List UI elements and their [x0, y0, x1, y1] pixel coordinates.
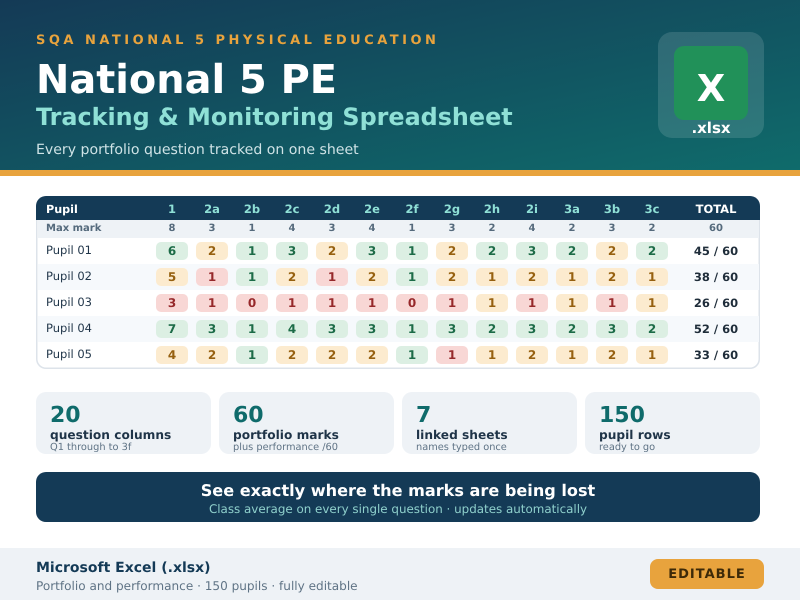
pupil 02 row: 2 — [608, 270, 616, 284]
pupil 05 row: 2 — [528, 348, 536, 362]
pupil 05 row: 2 — [328, 348, 336, 362]
pupil 03 row: 1 — [608, 296, 616, 310]
max mark row: 8 — [169, 223, 175, 234]
stat card: portfolio marks: plus performance /60 — [233, 442, 338, 453]
pupil 05 row — [46, 346, 738, 364]
stat card: linked sheets: names typed once — [416, 442, 507, 453]
pupil 04 row: 52 / 60 — [694, 322, 738, 336]
table header row: 3b — [604, 202, 620, 216]
pupil 03 row: 26 / 60 — [694, 296, 738, 310]
callout heading: See exactly where the marks are being lost — [201, 480, 595, 500]
pupil 01 row: 6 — [168, 244, 176, 258]
pupil 01 row: 45 / 60 — [694, 244, 738, 258]
pupil 01 row: 3 — [288, 244, 296, 258]
pupil 03 row — [46, 294, 738, 312]
pupil 04 row: 2 — [488, 322, 496, 336]
pupil 02 row: 1 — [648, 270, 656, 284]
pupil 04 row: Pupil 04 — [46, 321, 92, 335]
max mark row: 3 — [609, 223, 615, 234]
pupil 01 row: 2 — [488, 244, 496, 258]
pupil 03 row: 1 — [288, 296, 296, 310]
pupil 05 row: 2 — [608, 348, 616, 362]
stat card: portfolio marks: portfolio marks — [233, 428, 339, 442]
pupil 02 row: 2 — [448, 270, 456, 284]
editable badge: EDITABLE — [668, 567, 746, 582]
max mark row: 4 — [289, 223, 295, 234]
pupil 02 row: 2 — [368, 270, 376, 284]
pupil 05 row: 1 — [568, 348, 576, 362]
pupil 03 row: 1 — [448, 296, 456, 310]
header banner — [0, 0, 800, 170]
pupil 02 row: 1 — [488, 270, 496, 284]
stat card: question columns: 20 — [50, 403, 81, 428]
stat card: linked sheets — [402, 392, 577, 454]
pupil 05 row: 1 — [648, 348, 656, 362]
pupil 05 row: 4 — [168, 348, 176, 362]
max mark row — [38, 220, 758, 238]
pupil 02 row: 1 — [248, 270, 256, 284]
icon: green X tile — [674, 46, 748, 120]
footer bar — [0, 548, 800, 600]
table header row: 3a — [564, 202, 580, 216]
pupil 01 row: 2 — [568, 244, 576, 258]
table header row: TOTAL — [696, 202, 736, 216]
table header row: 2h — [484, 202, 500, 216]
pupil 03 row: 0 — [248, 296, 256, 310]
table header row: 1 — [168, 202, 176, 216]
pupil 02 row: 1 — [208, 270, 216, 284]
eyebrow text: SQA NATIONAL 5 PHYSICAL EDUCATION — [36, 33, 439, 48]
stat card: pupil rows: ready to go — [599, 442, 655, 453]
pupil 02 row: Pupil 02 — [46, 269, 92, 283]
pupil 02 row: 1 — [408, 270, 416, 284]
max mark row: 60 — [709, 223, 723, 234]
callout subtext: Class average on every single question · updates automatically — [209, 502, 587, 516]
pupil 04 row: 3 — [368, 322, 376, 336]
pupil 03 row: 1 — [208, 296, 216, 310]
pupil 01 row: 1 — [408, 244, 416, 258]
pupil 01 row — [46, 242, 738, 260]
pupil 01 row: 1 — [248, 244, 256, 258]
callout banner — [36, 472, 760, 522]
pupil 04 row: 7 — [168, 322, 176, 336]
pupil 05 row: 2 — [288, 348, 296, 362]
pupil 03 row: Pupil 03 — [46, 295, 92, 309]
pupil 05 row: 1 — [448, 348, 456, 362]
pupil 03 row: 0 — [408, 296, 416, 310]
pupil 05 row: Pupil 05 — [46, 347, 92, 361]
footer details: Portfolio and performance · 150 pupils · fully editable — [36, 579, 358, 593]
pupil 02 row: 2 — [288, 270, 296, 284]
pupil 05 row: 1 — [248, 348, 256, 362]
pupil 04 row: 3 — [448, 322, 456, 336]
max mark row: 2 — [649, 223, 655, 234]
pupil 03 row: 1 — [488, 296, 496, 310]
max mark row: 4 — [529, 223, 535, 234]
stat card: pupil rows: 150 — [599, 403, 645, 428]
pupil 01 row: 2 — [448, 244, 456, 258]
max mark row: 3 — [329, 223, 335, 234]
pupil 04 row: 2 — [648, 322, 656, 336]
pupil 03 row: 1 — [648, 296, 656, 310]
pupil 04 row: 3 — [608, 322, 616, 336]
table header row: Pupil — [46, 203, 78, 216]
footer title: Microsoft Excel (.xlsx) — [36, 560, 211, 576]
stat card: portfolio marks: 60 — [233, 403, 264, 428]
table header row: 2d — [324, 202, 340, 216]
max mark row: 2 — [489, 223, 495, 234]
max mark row: 3 — [209, 223, 215, 234]
table header row — [36, 196, 760, 220]
pupil 04 row: 3 — [328, 322, 336, 336]
pupil 03 row: 3 — [168, 296, 176, 310]
pupil 04 row: 2 — [568, 322, 576, 336]
pupil 01 row: 3 — [368, 244, 376, 258]
pupil 04 row: 4 — [288, 322, 296, 336]
pupil 05 row: 2 — [368, 348, 376, 362]
pupil 01 row: 2 — [648, 244, 656, 258]
pupil 05 row: 2 — [208, 348, 216, 362]
file extension label: .xlsx — [691, 119, 731, 137]
pupil 03 row: 1 — [328, 296, 336, 310]
pupil 04 row — [38, 316, 758, 342]
pupil 01 row: 2 — [328, 244, 336, 258]
pupil 01 row: 3 — [528, 244, 536, 258]
max mark row: 1 — [249, 223, 255, 234]
title: National 5 PE — [36, 57, 337, 103]
pupil 04 row: 3 — [208, 322, 216, 336]
marks table — [36, 196, 760, 369]
tagline: Every portfolio question tracked on one sheet — [36, 142, 359, 158]
pupil 05 row: 1 — [408, 348, 416, 362]
pupil 03 row: 1 — [568, 296, 576, 310]
max mark row: 3 — [449, 223, 455, 234]
table header row: 2a — [204, 202, 220, 216]
pupil 02 row: 38 / 60 — [694, 270, 738, 284]
pupil 01 row: 2 — [608, 244, 616, 258]
pupil 02 row — [38, 264, 758, 290]
max mark row: Max mark — [46, 223, 101, 234]
table header row: 3c — [645, 202, 659, 216]
pupil 01 row: 2 — [208, 244, 216, 258]
max mark row: 2 — [569, 223, 575, 234]
stat card: portfolio marks — [219, 392, 394, 454]
max mark row: 4 — [369, 223, 375, 234]
stat card: linked sheets: linked sheets — [416, 428, 508, 442]
stat card: question columns — [36, 392, 211, 454]
stat card: question columns: question columns — [50, 428, 171, 442]
table header row: 2b — [244, 202, 260, 216]
table header row: 2c — [285, 202, 299, 216]
stat card: linked sheets: 7 — [416, 403, 431, 428]
pupil 04 row: 1 — [248, 322, 256, 336]
stat card: question columns: Q1 through to 3f — [50, 442, 131, 453]
pupil 03 row: 1 — [368, 296, 376, 310]
accent stripe — [0, 170, 800, 176]
table header row: 2g — [444, 202, 460, 216]
pupil 04 row: 3 — [528, 322, 536, 336]
pupil 02 row: 2 — [528, 270, 536, 284]
table header row: 2e — [364, 202, 380, 216]
stat card: pupil rows — [585, 392, 760, 454]
editable badge — [650, 559, 764, 589]
stat card: pupil rows: pupil rows — [599, 428, 671, 442]
pupil 05 row: 33 / 60 — [694, 348, 738, 362]
pupil 02 row: 5 — [168, 270, 176, 284]
pupil 01 row: Pupil 01 — [46, 243, 92, 257]
table header row: 2f — [405, 202, 419, 216]
pupil 02 row: 1 — [568, 270, 576, 284]
subtitle: Tracking & Monitoring Spreadsheet — [36, 103, 513, 131]
icon: excel file — [658, 32, 764, 138]
table header row: 2i — [526, 202, 538, 216]
pupil 05 row: 1 — [488, 348, 496, 362]
pupil 04 row: 1 — [408, 322, 416, 336]
pupil 02 row: 1 — [328, 270, 336, 284]
max mark row: 1 — [409, 223, 415, 234]
icon: green X tile: X — [697, 67, 725, 110]
pupil 03 row: 1 — [528, 296, 536, 310]
